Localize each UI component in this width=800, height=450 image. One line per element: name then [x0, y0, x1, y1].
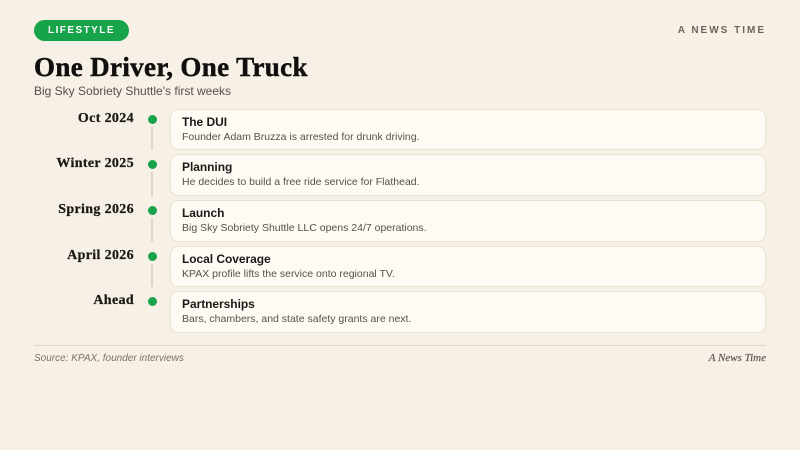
card: The DUI: The DUI — [182, 115, 227, 129]
card: Planning: Planning — [182, 160, 232, 174]
timeline row: Winter 2025 — [56, 154, 766, 196]
category pill: Lifestyle — [34, 20, 129, 41]
title: One Driver, One Truck — [34, 52, 308, 82]
timeline row: April 2026 — [67, 246, 766, 287]
card: The DUI: Founder Adam Bruzza is arrested for drunk driving. — [182, 131, 420, 143]
timeline row: Oct 2024: Oct 2024 — [78, 111, 134, 126]
card: Launch: Big Sky Sobriety Shuttle LLC opens 24/7 operations. — [182, 222, 427, 234]
timeline row: Ahead — [93, 291, 766, 333]
card: Local Coverage: Local Coverage — [182, 252, 271, 266]
source note: Source: KPAX, founder interviews — [34, 353, 184, 364]
brand label: A NEWS TIME — [678, 25, 766, 36]
timeline — [56, 109, 766, 333]
timeline row: Winter 2025: Winter 2025 — [56, 156, 134, 171]
card: Planning — [170, 154, 766, 196]
timeline row: Spring 2026: Spring 2026 — [58, 202, 134, 217]
footer brand: A News Time — [709, 352, 766, 364]
subtitle: Big Sky Sobriety Shuttle's first weeks — [34, 84, 231, 98]
card: Partnerships: Partnerships — [182, 297, 255, 311]
card: Partnerships — [170, 291, 766, 333]
card: Local Coverage: KPAX profile lifts the service onto regional TV. — [182, 268, 395, 280]
card: Partnerships: Bars, chambers, and state safety grants are next. — [182, 313, 411, 325]
timeline row: Oct 2024 — [78, 109, 766, 150]
card: The DUI — [170, 109, 766, 150]
card: Planning: He decides to build a free ride service for Flathead. — [182, 176, 420, 188]
timeline row: Ahead: Ahead — [93, 293, 134, 308]
card: Launch — [170, 200, 766, 242]
timeline row: April 2026: April 2026 — [67, 248, 134, 263]
timeline row: Spring 2026 — [58, 200, 766, 242]
category pill: Lifestyle: LIFESTYLE — [48, 25, 115, 36]
card: Local Coverage — [170, 246, 766, 287]
card: Launch: Launch — [182, 206, 224, 220]
